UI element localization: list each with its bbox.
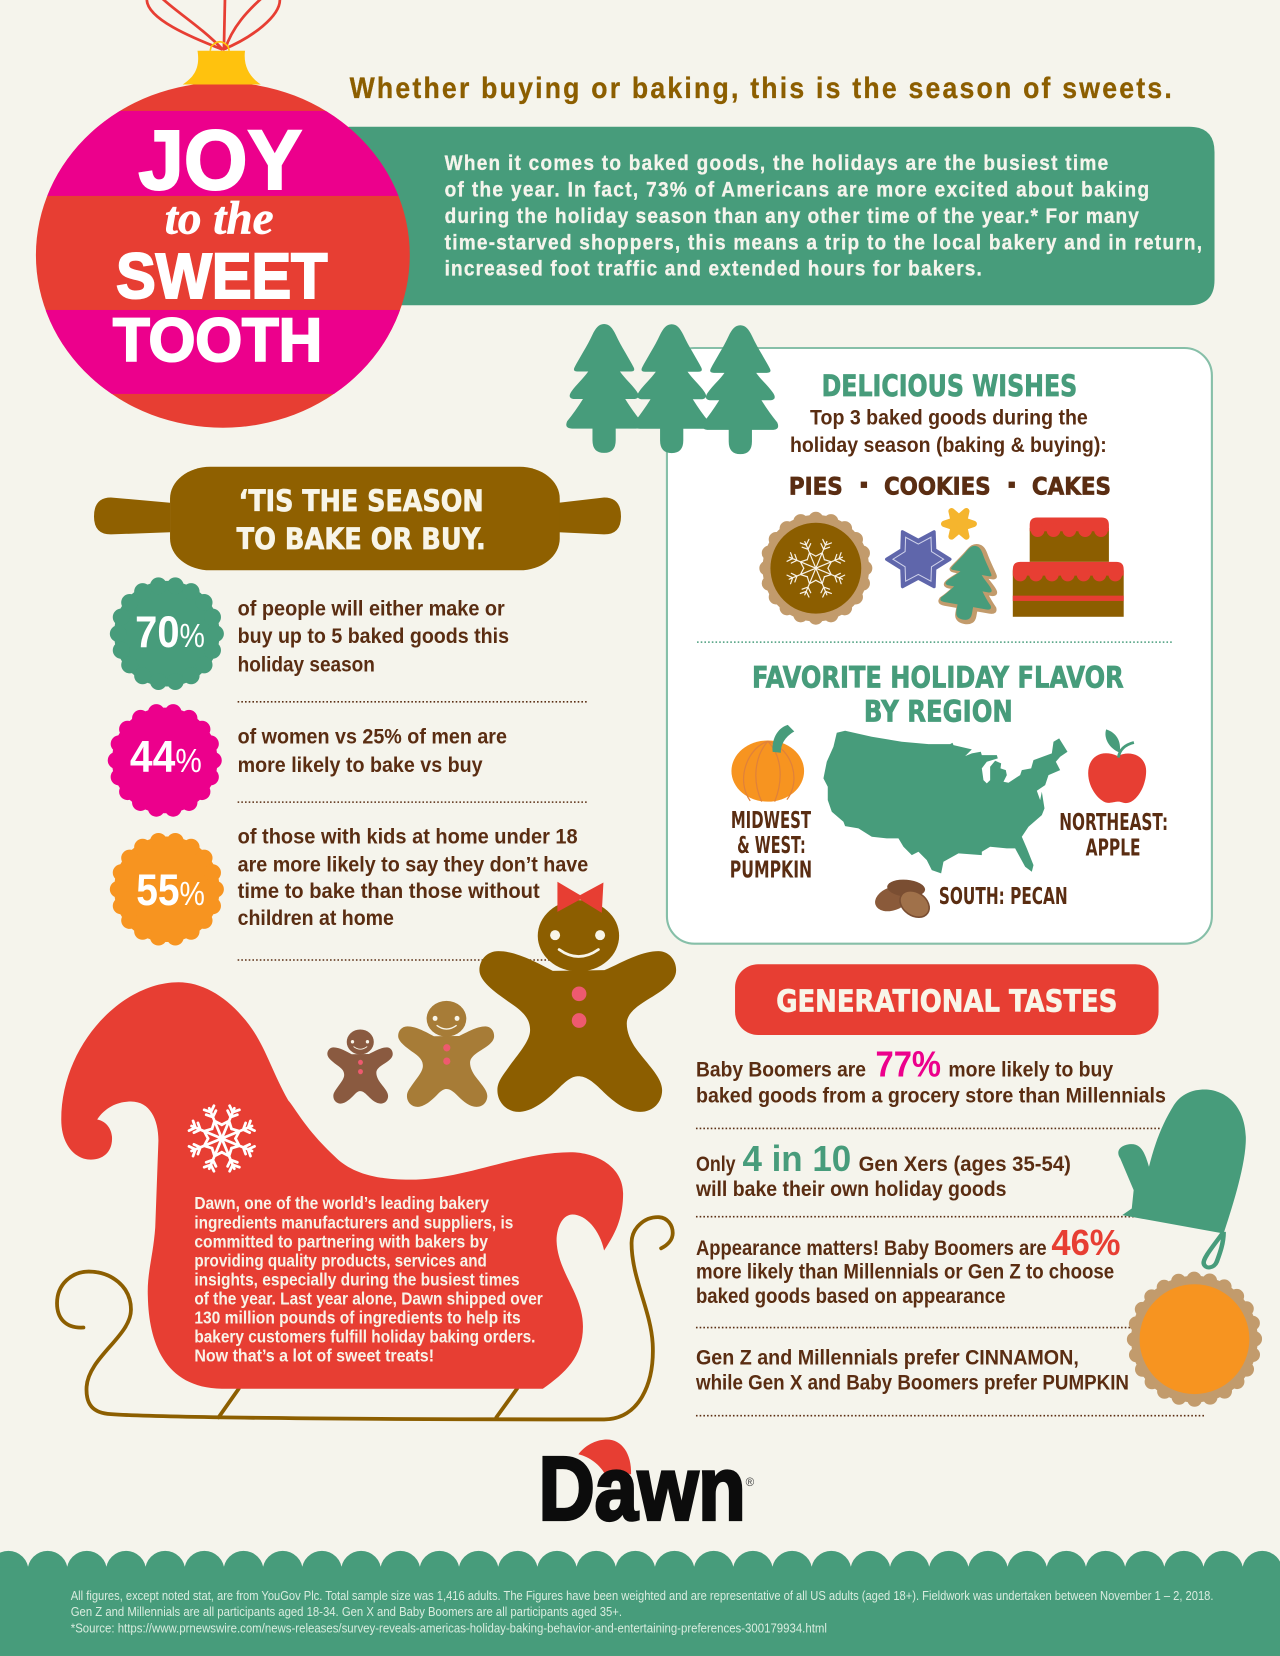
badge: 44%: % <box>175 742 202 780</box>
text: 55% description <box>238 823 588 930</box>
badge: 55%: 55 <box>136 866 180 915</box>
icon: apple <box>1088 729 1146 803</box>
text: 55% description: time to bake than those without <box>238 878 540 903</box>
label: northeast apple: APPLE <box>1086 834 1141 861</box>
text: Baby Boomers 77%: Baby Boomers are <box>696 1057 866 1082</box>
text: 4 in 10 Gen Xers: Only <box>696 1151 736 1176</box>
icon: layered cake <box>1013 518 1124 617</box>
text: about Dawn: Now that’s a lot of sweet treats! <box>194 1345 434 1365</box>
label row: pies, cookies, cakes: CAKES <box>1032 471 1111 500</box>
icon: oven mitt <box>1118 1089 1246 1267</box>
title: SWEET: SWEET <box>116 240 327 312</box>
text: 70% description: holiday season <box>238 652 375 677</box>
text: 4 in 10 Gen Xers: 4 in 10 <box>742 1139 851 1179</box>
icon: pumpkin <box>731 725 804 802</box>
text: Baby Boomers 77% <box>696 1045 1166 1108</box>
rolling pin heading <box>94 467 621 570</box>
text: 70% description: of people will either make or <box>238 596 505 621</box>
text: about Dawn: insights, especially during the busiest times <box>194 1269 520 1289</box>
icon: large gingerbread with bow <box>479 882 676 1112</box>
heading: favorite holiday flavor by region: BY REGION <box>864 694 1013 728</box>
intro banner: increased foot traffic and extended hours for bakers. <box>445 258 982 281</box>
label row: pies, cookies, cakes: PIES <box>789 471 843 500</box>
badge: 70% <box>114 581 220 686</box>
text: appearance matters 46%: Appearance matters! Baby Boomers are <box>696 1235 1047 1260</box>
label: midwest and west pumpkin <box>730 807 812 884</box>
heading: favorite holiday flavor by region: FAVORITE HOLIDAY FLAVOR <box>752 661 1124 695</box>
map: United States <box>823 731 1067 873</box>
footnotes <box>71 1589 1213 1636</box>
ornament ribbon <box>147 0 280 50</box>
icon: small gingerbread <box>327 1029 393 1104</box>
sleigh runners <box>57 1217 673 1419</box>
badge: 44%: 44 <box>130 733 176 782</box>
text: cinnamon and pumpkin preferences: Gen Z and Millennials prefer CINNAMON, <box>696 1345 1079 1370</box>
text: appearance matters 46%: baked goods based on appearance <box>696 1283 1005 1308</box>
text: about Dawn <box>194 1193 543 1365</box>
text: appearance matters 46%: more likely than Millennials or Gen Z to choose <box>696 1258 1114 1283</box>
text: 4 in 10 Gen Xers: Gen Xers (ages 35-54) <box>859 1151 1071 1176</box>
text: 44% description: more likely to bake vs buy <box>238 752 483 777</box>
icon: medium gingerbread <box>398 1001 494 1107</box>
icon: pie with snowflake <box>763 515 869 622</box>
text: about Dawn: committed to partnering with bakers by <box>194 1231 488 1251</box>
text: Baby Boomers 77%: more likely to buy <box>948 1057 1113 1082</box>
stat: 70 percent <box>114 581 509 686</box>
headline: Whether buying or baking, this is the season of sweets. <box>350 72 1172 105</box>
text: about Dawn: of the year. Last year alone, Dawn shipped over <box>194 1288 543 1308</box>
heading: generational tastes: GENERATIONAL TASTES <box>776 985 1117 1020</box>
subheading: top 3 baked goods: holiday season (baking & buying): <box>790 432 1107 457</box>
badge: 55%: % <box>180 875 205 913</box>
text: 44% description <box>238 724 507 777</box>
logo: Dawn: ® <box>746 1476 755 1489</box>
label: northeast apple: NORTHEAST: <box>1059 809 1168 836</box>
stat: 44 percent <box>112 708 507 813</box>
rolling pin heading: ‘TIS THE SEASON <box>239 484 484 518</box>
title: JOY: JOY <box>138 113 302 207</box>
text: about Dawn: Dawn, one of the world’s leading bakery <box>194 1193 489 1213</box>
text: 55% description: children at home <box>238 905 394 930</box>
text: appearance matters 46%: 46% <box>1051 1223 1121 1263</box>
text: cinnamon and pumpkin preferences: while Gen X and Baby Boomers prefer PUMPKIN <box>695 1369 1129 1394</box>
text: cinnamon and pumpkin preferences <box>695 1345 1129 1394</box>
badge: 70%: % <box>180 617 205 655</box>
text: 55% description: are more likely to say they don’t have <box>238 851 588 876</box>
panel: delicious wishes and flavors <box>667 348 1212 944</box>
text: about Dawn: ingredients manufacturers and suppliers, is <box>194 1212 513 1232</box>
label: midwest and west pumpkin: & WEST: <box>737 832 806 859</box>
intro banner: of the year. In fact, 73% of Americans are more excited about baking <box>445 178 1149 202</box>
text: 55% description: of those with kids at home under 18 <box>238 823 578 848</box>
text: 70% description: buy up to 5 baked goods this <box>238 623 509 648</box>
text: 4 in 10 Gen Xers: will bake their own holiday goods <box>695 1176 1006 1201</box>
intro banner: When it comes to baked goods, the holidays are the busiest time <box>445 152 1108 175</box>
badge: 44% <box>112 708 218 813</box>
intro banner <box>349 127 1215 305</box>
text: appearance matters 46% <box>696 1223 1121 1308</box>
label: northeast apple <box>1059 809 1168 861</box>
label: midwest and west pumpkin: MIDWEST <box>731 807 811 834</box>
text: Baby Boomers 77%: baked goods from a grocery store than Millennials <box>696 1083 1166 1108</box>
subheading: top 3 baked goods <box>790 405 1107 457</box>
heading: generational tastes <box>735 964 1159 1035</box>
text: 44% description: of women vs 25% of men are <box>238 724 507 749</box>
text: about Dawn: 130 million pounds of ingredients to help its <box>194 1307 521 1327</box>
footnotes: Gen Z and Millennials are all participants aged 18-34. Gen X and Baby Boomers are all participants aged 35+. <box>71 1605 622 1619</box>
label: midwest and west pumpkin: PUMPKIN <box>730 857 812 884</box>
title: to the: to the <box>165 193 274 244</box>
text: 70% description <box>238 596 509 677</box>
footnotes: *Source: https://www.prnewswire.com/news-releases/survey-reveals-americas-holiday-baking-behavior-and-entertaining-preferences-300179934.html <box>71 1622 827 1636</box>
label row: pies, cookies, cakes <box>789 471 1111 500</box>
ornament ball <box>32 74 417 433</box>
heading: delicious wishes: DELICIOUS WISHES <box>822 369 1077 403</box>
badge: 55% <box>114 836 220 942</box>
subheading: top 3 baked goods: Top 3 baked goods during the <box>810 405 1088 430</box>
icon: cookies <box>887 511 1005 627</box>
label: south pecan: SOUTH: PECAN <box>939 883 1068 910</box>
text: Baby Boomers 77%: 77% <box>876 1045 941 1085</box>
sleigh body <box>61 982 623 1389</box>
badge: 70%: 70 <box>135 608 180 657</box>
text: about Dawn: providing quality products, services and <box>194 1250 487 1270</box>
stat: 55 percent <box>114 823 588 942</box>
text: 4 in 10 Gen Xers <box>695 1139 1071 1201</box>
heading: favorite holiday flavor by region <box>752 661 1124 728</box>
ornament with title <box>32 0 417 433</box>
intro banner: time-starved shoppers, this means a trip to the local bakery and in return, <box>445 231 1202 255</box>
sleigh with company text <box>57 982 673 1419</box>
icon: pecans <box>872 878 934 923</box>
text: about Dawn: bakery customers fulfill holiday baking orders. <box>194 1326 535 1346</box>
label row: pies, cookies, cakes: COOKIES <box>884 471 991 500</box>
icon: pine trees <box>566 324 778 454</box>
footer <box>0 1567 1280 1656</box>
rolling pin heading: TO BAKE OR BUY. <box>237 522 486 556</box>
icon: orange pie <box>1131 1276 1258 1403</box>
intro banner: during the holiday season than any other time of the year.* For many <box>445 205 1139 228</box>
logo: Dawn: Dawn <box>539 1440 746 1540</box>
ornament cap <box>183 42 261 85</box>
icon: snowflake <box>189 1106 255 1171</box>
title: TOOTH: TOOTH <box>113 306 322 374</box>
